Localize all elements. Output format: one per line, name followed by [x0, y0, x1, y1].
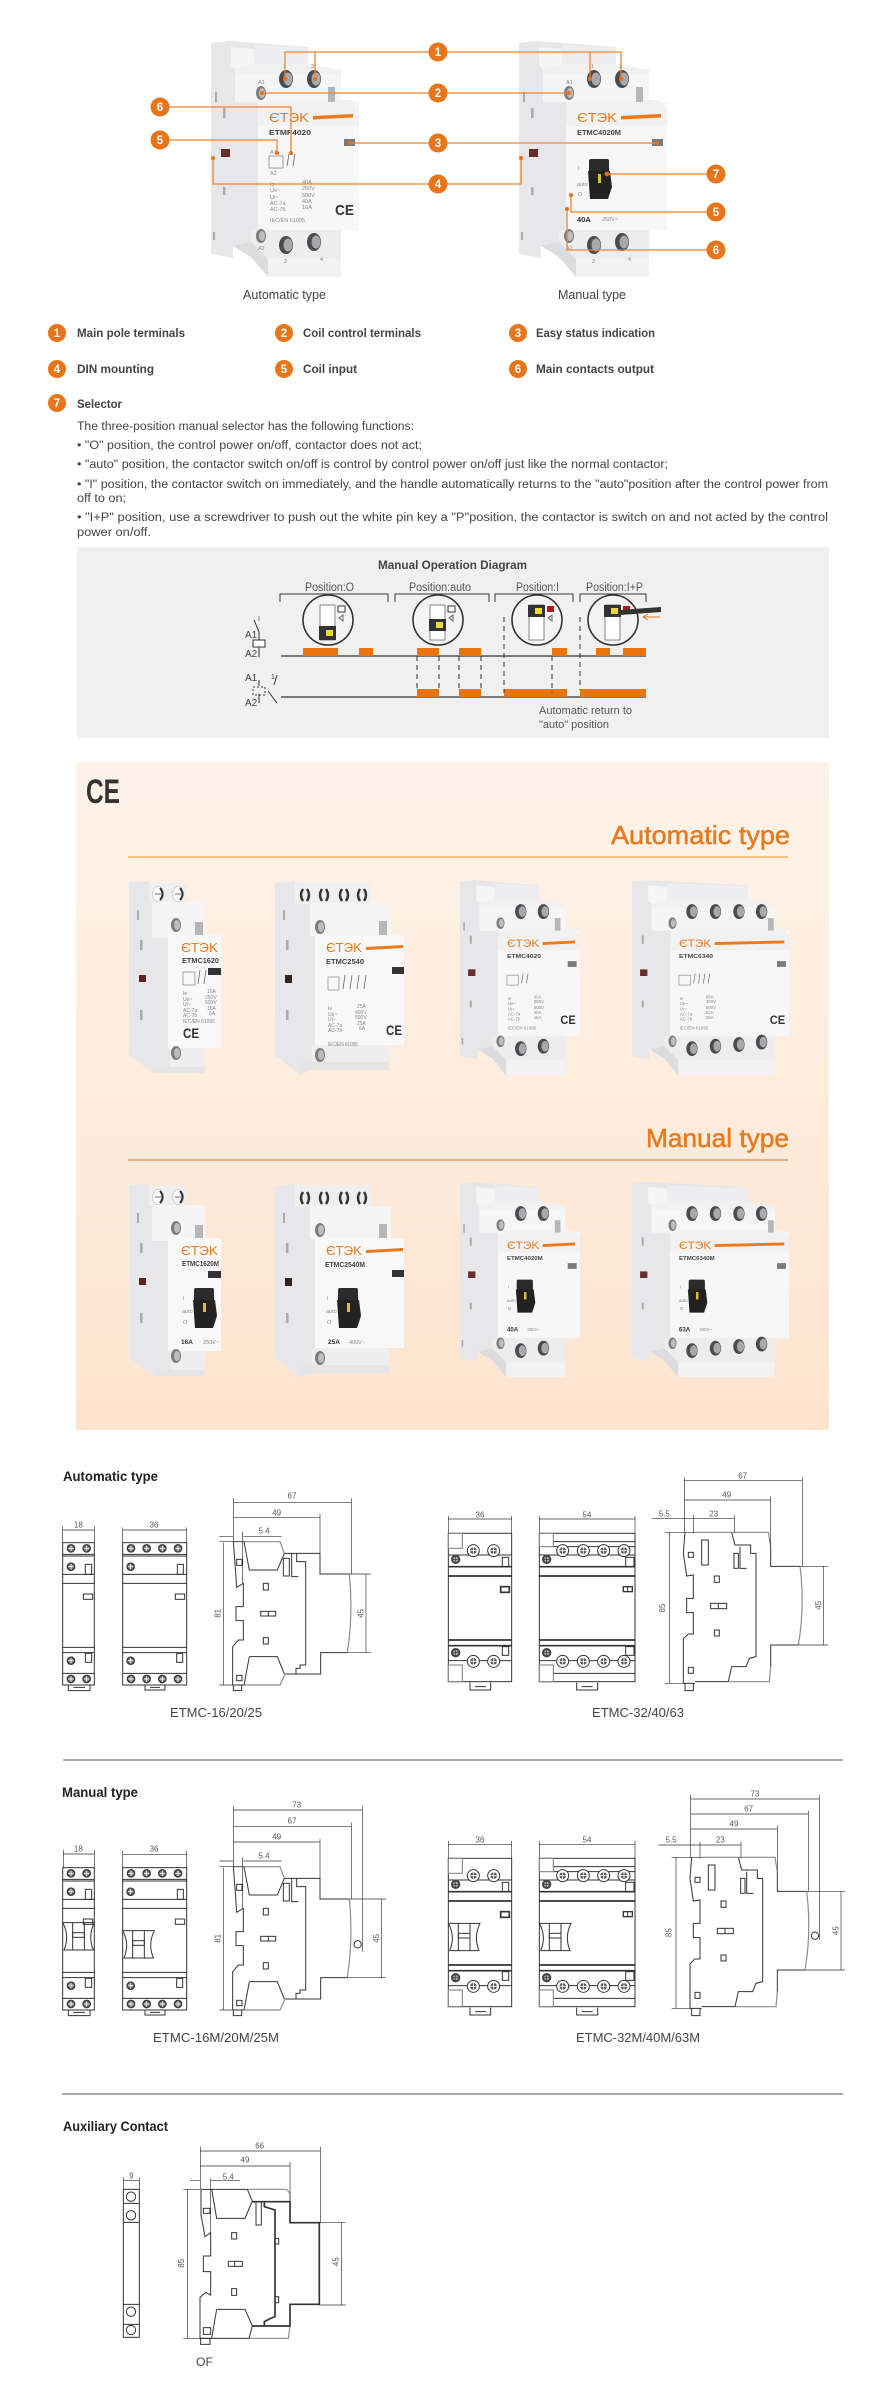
divider: [63, 1759, 843, 1761]
product: automatic contactor: 500V: [302, 193, 315, 199]
device ETMC6340: 400V: [706, 999, 716, 1004]
device ETMC6340: ETMC6340: [679, 954, 713, 960]
device ETMC6340: 500V: [706, 1005, 716, 1010]
device ETMC1620: Ui~: [183, 1002, 191, 1008]
device ETMC4020: 16A: [534, 1015, 542, 1020]
drawing: ETMC-16/20/25: 36: [150, 1521, 159, 1530]
side view: [200, 2189, 319, 2344]
position labels: Position:auto: [409, 582, 471, 594]
panel: product range: [76, 762, 829, 1430]
heading: manual type: Manual type: [646, 1123, 789, 1153]
hero product section: [150, 41, 726, 302]
drawing: ETMC-32/40/63: 67: [738, 1471, 748, 1480]
product: manual contactor: A1: [566, 80, 573, 86]
device ETMC1620: AC-7a: [183, 1008, 197, 1014]
device ETMC2540M: [275, 1184, 404, 1378]
callout badges: 5: [713, 207, 720, 219]
selector description text: • "O" position, the control power on/off, contactor does not act;: [77, 440, 422, 452]
device ETMC2540: IEC/EN 61095: [328, 1042, 358, 1048]
coil symbol bottom: A1: [245, 673, 258, 684]
device ETMC1620M: 16A: [181, 1339, 193, 1346]
screwdriver: [620, 607, 661, 615]
timing row 1: [281, 648, 646, 656]
product: manual contactor: ETMC4020M: [577, 130, 621, 137]
caption: automatic type: Automatic type: [243, 288, 326, 302]
legend: 4: [54, 364, 61, 376]
diagram title: Manual Operation Diagram: [378, 558, 527, 572]
product: manual contactor: 2: [592, 259, 595, 265]
device ETMC4020: AC-7a: [508, 1012, 521, 1017]
device ETMC2540: 25A: [357, 1004, 367, 1010]
device ETMC6340: 25A: [706, 1015, 714, 1020]
legend: 1: [54, 328, 61, 340]
device ETMC1620M: ЄTЭK: [181, 1243, 218, 1258]
product: automatic contactor: AC-7a: [270, 201, 287, 207]
device ETMC4020M: 40A: [507, 1327, 519, 1334]
drawing: ETMC-16/20/25: 5.4: [258, 1527, 270, 1536]
drawing: ETMC-16M/20M/25M: 81: [213, 1933, 222, 1943]
device ETMC4020: 250V: [534, 999, 544, 1004]
caption: ETMC-32M/40M/63M: ETMC-32M/40M/63M: [576, 2030, 700, 2045]
product: automatic contactor: A2: [258, 246, 265, 252]
selector description text: [77, 421, 828, 539]
device ETMC4020: Ue~: [508, 1001, 516, 1006]
device ETMC4020M: O: [508, 1306, 512, 1311]
device ETMC4020: 40A: [534, 994, 542, 999]
heading: dimensions automatic type: Automatic type: [63, 1469, 158, 1484]
selector description text: • "I" position, the contactor switch on immediately, and the handle automatically returns to the "auto"position after the control power from: [77, 479, 828, 491]
legend: 2: [281, 328, 287, 340]
selector dial I: [512, 595, 562, 645]
drawing: ETMC-32M/40M/63M: 49: [730, 1820, 739, 1829]
coil symbol top: A1: [245, 630, 258, 641]
device ETMC1620M: ETMC1620M: [182, 1261, 219, 1268]
product: manual contactor: 1: [591, 64, 594, 70]
legend: DIN mounting: [77, 364, 154, 376]
product: automatic contactor: Ie: [270, 182, 275, 188]
product: automatic contactor: CE: [335, 202, 354, 219]
selector description text: • "I+P" position, use a screwdriver to push out the white pin key a "P"position, the contactor is switch on and not acted by the control: [77, 512, 828, 524]
dimensions: [177, 2142, 346, 2338]
device ETMC6340: Ui~: [680, 1007, 687, 1012]
drawing: ETMC-16M/20M/25M: 5.4: [258, 1852, 270, 1861]
selector dial O: [303, 595, 353, 645]
device ETMC6340: AC-7b: [680, 1017, 693, 1022]
product: manual contactor: 40A: [577, 215, 591, 224]
device ETMC1620M: [129, 1184, 221, 1376]
device ETMC6340M: I: [680, 1285, 681, 1290]
legend: 3: [515, 328, 521, 340]
device ETMC2540: 25A: [357, 1021, 367, 1027]
device ETMC4020: [460, 880, 580, 1075]
panel: manual operation diagram: [77, 547, 829, 738]
product: automatic contactor: ETMF4020: [269, 130, 311, 137]
device ETMC1620M: O: [183, 1320, 188, 1326]
device ETMC2540: AC-7a: [328, 1023, 342, 1029]
drawing: ETMC-32M/40M/63M: 5.5: [665, 1836, 677, 1845]
product: manual contactor: ЄTЭK: [577, 110, 617, 125]
dimensions: 45: [332, 2257, 341, 2266]
product: manual contactor: A2: [566, 246, 573, 252]
device ETMC2540: ETMC2540: [326, 959, 364, 966]
device ETMC4020M: auto: [507, 1298, 516, 1303]
caption: ETMC-32/40/63: ETMC-32/40/63: [592, 1705, 684, 1720]
product: automatic contactor: 16A: [302, 205, 312, 211]
callout badges: 1: [435, 47, 442, 59]
position labels: Position:I: [516, 582, 559, 594]
device ETMC4020M: [460, 1182, 580, 1377]
product: manual contactor: 3: [619, 64, 622, 70]
legend: Main pole terminals: [77, 328, 185, 340]
product: manual contactor: 4: [628, 257, 631, 263]
note: automatic return: [539, 705, 632, 731]
drawing: ETMC-16/20/25: 81: [213, 1608, 222, 1618]
device ETMC1620M: auto: [182, 1309, 193, 1315]
legend: Coil input: [303, 364, 357, 376]
product: automatic contactor: ЄTЭK: [269, 110, 309, 125]
drawing: ETMC-32M/40M/63M: 45: [831, 1926, 840, 1935]
device ETMC6340M: [632, 1182, 789, 1377]
device ETMC6340: [632, 880, 789, 1075]
drawing: ETMC-32M/40M/63M: 73: [751, 1790, 760, 1799]
device ETMC2540: Ue~: [328, 1012, 337, 1018]
selector description text: The three-position manual selector has the following functions:: [77, 421, 414, 433]
device ETMC6340M: auto: [679, 1298, 688, 1303]
position labels: Position:I+P: [586, 582, 643, 594]
coil symbol bottom: [245, 673, 277, 709]
device ETMC1620: CE: [183, 1025, 199, 1041]
position labels: [305, 582, 643, 594]
selector description text: power on/off.: [77, 527, 151, 539]
product: automatic contactor: AC-7b: [270, 207, 286, 213]
device ETMC2540: 6A: [359, 1026, 366, 1032]
device ETMC6340M: 63A: [679, 1327, 691, 1334]
drawing: ETMC-32/40/63: 85: [658, 1603, 667, 1612]
device ETMC1620: Ie: [183, 991, 187, 997]
drawing: ETMC-32/40/63: [448, 1471, 828, 1691]
product: automatic contactor: IEC/EN 61095: [270, 218, 305, 224]
legend: Main contacts output: [536, 364, 654, 376]
product: automatic contactor: 3: [311, 64, 314, 70]
device ETMC6340: IEC/EN 61095: [680, 1026, 709, 1031]
drawing: ETMC-32/40/63: 45: [814, 1600, 823, 1610]
caption: ETMC-16M/20M/25M: ETMC-16M/20M/25M: [153, 2030, 279, 2045]
callout badges: 5: [157, 135, 164, 147]
device ETMC1620: ETMC1620: [182, 958, 219, 965]
heading: auxiliary contact: Auxiliary Contact: [63, 2119, 168, 2134]
drawing: ETMC-32/40/63: 23: [709, 1509, 719, 1518]
product: manual contactor: 250V~: [602, 217, 618, 223]
position brackets: [280, 594, 646, 602]
device ETMC6340M: ЄTЭK: [679, 1240, 711, 1252]
product: automatic contactor: Ui~: [270, 195, 278, 201]
drawing: ETMC-32M/40M/63M: 54: [583, 1835, 592, 1844]
coil symbol top: [245, 616, 265, 660]
drawing: ETMC-32M/40M/63M: 23: [716, 1836, 725, 1845]
caption: manual type: Manual type: [558, 288, 626, 302]
device ETMC1620: 250V: [205, 995, 217, 1001]
device ETMC4020M: ЄTЭK: [507, 1240, 539, 1252]
front strip: 9: [129, 2172, 134, 2181]
callout badges: 4: [435, 179, 442, 191]
drawing: ETMC-16M/20M/25M: [63, 1800, 386, 2016]
product: automatic contactor: Ue~: [270, 188, 280, 194]
selector description text: • "auto" position, the contactor switch on/off is control by control power on/off just like the normal contactor;: [77, 459, 668, 471]
drawing: ETMC-32/40/63: 54: [583, 1510, 592, 1519]
device ETMC2540: Ui~: [328, 1017, 336, 1023]
product: automatic contactor: 250V: [302, 186, 315, 192]
drawing: ETMC-16M/20M/25M: 18: [74, 1845, 83, 1854]
selector dial auto: [413, 595, 463, 645]
divider: [62, 2093, 843, 2095]
coil symbol bottom: 1: [271, 674, 275, 681]
device ETMC1620M: 250V~: [203, 1340, 219, 1346]
device ETMC2540M: 25A: [328, 1339, 340, 1346]
drawing: ETMC-16/20/25: 45: [356, 1608, 365, 1618]
device ETMC1620: 16A: [207, 989, 217, 995]
product: manual contactor: auto: [577, 182, 588, 188]
device ETMC2540M: ETMC2540M: [325, 1262, 365, 1269]
caption: ETMC-16/20/25: ETMC-16/20/25: [170, 1705, 262, 1720]
device ETMC1620: [129, 881, 221, 1073]
device ETMC2540: Ie: [328, 1006, 332, 1012]
drawing: ETMC-16M/20M/25M: 67: [288, 1817, 297, 1826]
drawing: ETMC-32M/40M/63M: 67: [744, 1805, 754, 1814]
device ETMC4020: 40A: [534, 1010, 542, 1015]
callout badges: 7: [713, 169, 719, 181]
callout badges: 6: [713, 245, 719, 257]
product: automatic contactor: 40A: [302, 199, 312, 205]
product: automatic contactor: 40A: [302, 180, 312, 186]
drawing: ETMC-32M/40M/63M: 85: [665, 1928, 674, 1937]
timing row 2: [281, 689, 646, 697]
note: automatic return: "auto" position: [539, 719, 609, 731]
coil symbol top: I: [258, 616, 260, 623]
selector dial I+P: [588, 595, 638, 645]
drawing: ETMC-16M/20M/25M: 49: [272, 1833, 282, 1842]
product: automatic contactor: 2: [284, 259, 287, 265]
device ETMC1620M: I: [183, 1296, 185, 1302]
device ETMC2540M: 400V~: [349, 1340, 365, 1346]
device ETMC4020M: I: [508, 1285, 509, 1290]
device ETMC4020M: ETMC4020M: [507, 1256, 543, 1262]
device ETMC4020: ETMC4020: [507, 954, 541, 960]
device ETMC1620: ЄTЭK: [181, 940, 218, 955]
device ETMC6340M: 400V~: [699, 1327, 713, 1332]
device ETMC6340: Ie: [680, 996, 684, 1001]
device ETMC2540M: ЄTЭK: [326, 1243, 362, 1258]
product: automatic contactor: A1: [270, 150, 277, 156]
drawing: ETMC-16/20/25: 49: [272, 1508, 282, 1517]
device ETMC2540: AC-7b: [328, 1028, 342, 1034]
device ETMC4020: ЄTЭK: [507, 938, 539, 950]
device ETMC6340M: ETMC6340M: [679, 1256, 715, 1262]
dimensions: 66: [255, 2142, 265, 2151]
device ETMC2540: ЄTЭK: [326, 940, 362, 955]
drawing: ETMC-32M/40M/63M: [448, 1790, 845, 2016]
dimensions: 5.4: [223, 2173, 234, 2182]
device ETMC2540: CE: [386, 1022, 402, 1038]
device ETMC6340: Ue~: [680, 1001, 688, 1006]
product: manual contactor: [519, 41, 667, 277]
caption: OF: OF: [196, 2355, 213, 2369]
callout badges: 2: [435, 88, 441, 100]
callout badges: 6: [157, 102, 163, 114]
position labels: Position:O: [305, 582, 354, 594]
coil symbol bottom: A2: [245, 698, 258, 709]
device ETMC4020M: 250V~: [527, 1327, 541, 1332]
device ETMC4020: Ie: [508, 996, 512, 1001]
legend: Coil control terminals: [303, 328, 421, 340]
device ETMC6340: ЄTЭK: [679, 938, 711, 950]
dashed guides: [417, 617, 580, 693]
drawing: ETMC-16/20/25: 67: [288, 1492, 297, 1501]
device ETMC2540M: I: [327, 1296, 329, 1302]
device ETMC6340: 63A: [706, 994, 714, 999]
drawing: ETMC-16/20/25: 18: [74, 1521, 83, 1530]
device ETMC6340: 63A: [706, 1010, 714, 1015]
callout lines: [160, 52, 716, 250]
device ETMC2540M: O: [327, 1320, 332, 1326]
device ETMC4020: CE: [560, 1013, 576, 1027]
callout badges: [150, 42, 726, 260]
device ETMC1620: 16A: [207, 1006, 217, 1012]
device ETMC4020: AC-7b: [508, 1017, 521, 1022]
device ETMC2540: 400V: [355, 1010, 367, 1016]
CE mark: CE: [86, 773, 120, 811]
device ETMC1620: 6A: [209, 1011, 216, 1017]
drawing: ETMC-16M/20M/25M: 36: [150, 1845, 159, 1854]
product: manual contactor: O: [578, 192, 583, 198]
device ETMC2540: [275, 881, 404, 1075]
drawing: ETMC-32/40/63: 49: [722, 1491, 732, 1500]
device ETMC1620: Ue~: [183, 997, 192, 1003]
coil symbol top: A2: [245, 649, 258, 660]
product: manual contactor: I: [578, 166, 580, 172]
drawing: OF auxiliary contact: [123, 2142, 346, 2344]
device ETMC6340: AC-7a: [680, 1012, 693, 1017]
device ETMC6340: CE: [770, 1013, 785, 1027]
drawing: ETMC-32M/40M/63M: 36: [476, 1835, 485, 1844]
legend: Selector: [77, 399, 123, 411]
device ETMC4020: Ui~: [508, 1007, 515, 1012]
callout badges: 3: [435, 138, 441, 150]
arrow: push direction: [643, 614, 660, 620]
drawing: ETMC-16/20/25: [63, 1492, 371, 1691]
drawing: ETMC-16M/20M/25M: 45: [372, 1933, 381, 1943]
device ETMC2540M: auto: [326, 1309, 337, 1315]
device ETMC1620: IEC/EN 61095: [183, 1019, 215, 1025]
front strip: [123, 2172, 139, 2337]
drawing: ETMC-32/40/63: 5.5: [659, 1509, 670, 1518]
product: automatic contactor: A2: [270, 171, 277, 177]
legend: 7: [54, 398, 60, 410]
legend: 6: [515, 364, 521, 376]
product: automatic contactor: A1: [258, 80, 265, 86]
heading: dimensions manual type: Manual type: [62, 1785, 138, 1800]
product: automatic contactor: [211, 41, 359, 277]
legend: Easy status indication: [536, 328, 655, 340]
note: automatic return: Automatic return to: [539, 705, 632, 717]
drawing: ETMC-16M/20M/25M: 73: [292, 1800, 302, 1809]
dimensions: 85: [177, 2258, 186, 2268]
product: automatic contactor: 1: [283, 64, 286, 70]
device ETMC6340M: O: [680, 1306, 684, 1311]
product: automatic contactor: 4: [320, 257, 323, 263]
selector description text: off to on;: [77, 493, 126, 505]
legend: [48, 324, 655, 412]
device ETMC2540: 500V: [355, 1015, 367, 1021]
dimensions: 49: [241, 2156, 250, 2165]
device ETMC4020: 500V: [534, 1005, 544, 1010]
legend: 5: [281, 364, 288, 376]
drawing: ETMC-32/40/63: 36: [476, 1510, 485, 1519]
device ETMC4020: IEC/EN 61095: [508, 1026, 537, 1031]
device ETMC1620: AC-7b: [183, 1013, 197, 1019]
heading: automatic type: Automatic type: [611, 820, 790, 850]
device ETMC1620: 500V: [205, 1000, 217, 1006]
